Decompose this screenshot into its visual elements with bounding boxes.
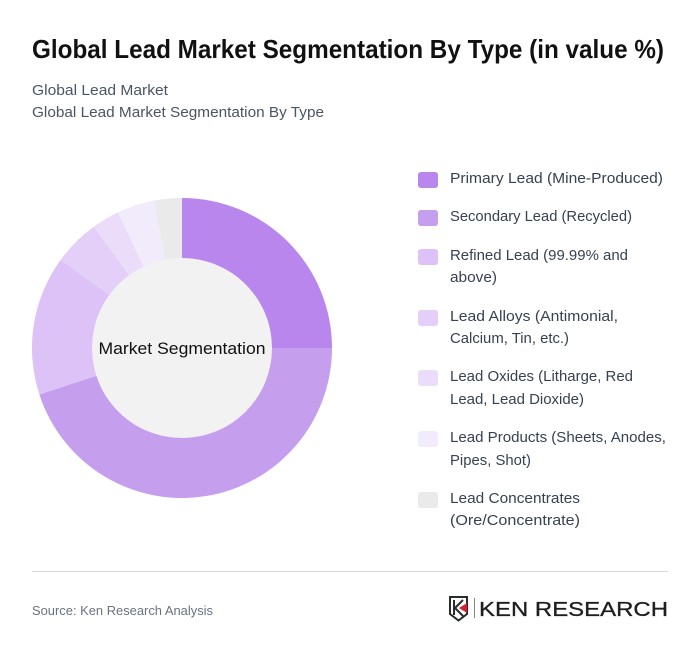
- segment: Lead Oxides: [94, 212, 182, 348]
- segment: Lead Alloys: [61, 227, 182, 348]
- donut centre: [92, 258, 272, 438]
- source note: Source: Ken Research Analysis: [32, 603, 213, 618]
- wordmark: KEN RESEARCH: [479, 599, 668, 621]
- legend item: Lead Concentrates: (Ore/Concentrate): [450, 512, 580, 529]
- segment: Lead Concentrates: [154, 198, 182, 348]
- legend item: Refined Lead: Refined Lead (99.99% and: [450, 247, 628, 264]
- legend item: Lead Concentrates: [418, 490, 580, 529]
- legend item: Lead Oxides: [418, 368, 633, 408]
- legend item: Lead Concentrates: Lead Concentrates: [450, 490, 580, 507]
- legend item: Lead Alloys: Calcium, Tin, etc.): [450, 330, 569, 347]
- subtitle: [32, 82, 324, 121]
- legend item: Lead Alloys: [418, 308, 618, 347]
- segment: Refined Lead: [32, 260, 182, 394]
- subtitle: Global Lead Market: [32, 82, 169, 99]
- legend item: Lead Products: Lead Products (Sheets, Anodes,: [450, 429, 666, 446]
- legend item: Primary Lead: Primary Lead (Mine-Produced): [450, 170, 663, 187]
- legend item: Lead Products: Pipes, Shot): [450, 452, 531, 469]
- centre label: Market Segmentation: [98, 339, 266, 358]
- legend item: Refined Lead: [418, 247, 628, 286]
- legend item: Refined Lead: above): [450, 269, 497, 286]
- legend item: Lead Oxides: Lead, Lead Dioxide): [450, 391, 584, 408]
- logo: Ken Research: [450, 597, 668, 621]
- legend item: Lead Alloys: Lead Alloys (Antimonial,: [450, 308, 618, 325]
- legend item: Lead Oxides: Lead Oxides (Litharge, Red: [450, 368, 633, 385]
- segment: Primary Lead: [182, 198, 332, 348]
- subtitle: Global Lead Market Segmentation By Type: [32, 104, 324, 121]
- legend item: Secondary Lead: Secondary Lead (Recycled): [450, 208, 632, 225]
- icon: shield: [450, 597, 467, 620]
- legend: [418, 170, 666, 529]
- donut chart: [32, 198, 332, 498]
- title: Global Lead Market Segmentation By Type (in value %): [32, 34, 664, 64]
- legend item: Lead Products: [418, 429, 666, 469]
- segment: Secondary Lead: [39, 348, 332, 498]
- segment: Lead Products: [118, 201, 182, 348]
